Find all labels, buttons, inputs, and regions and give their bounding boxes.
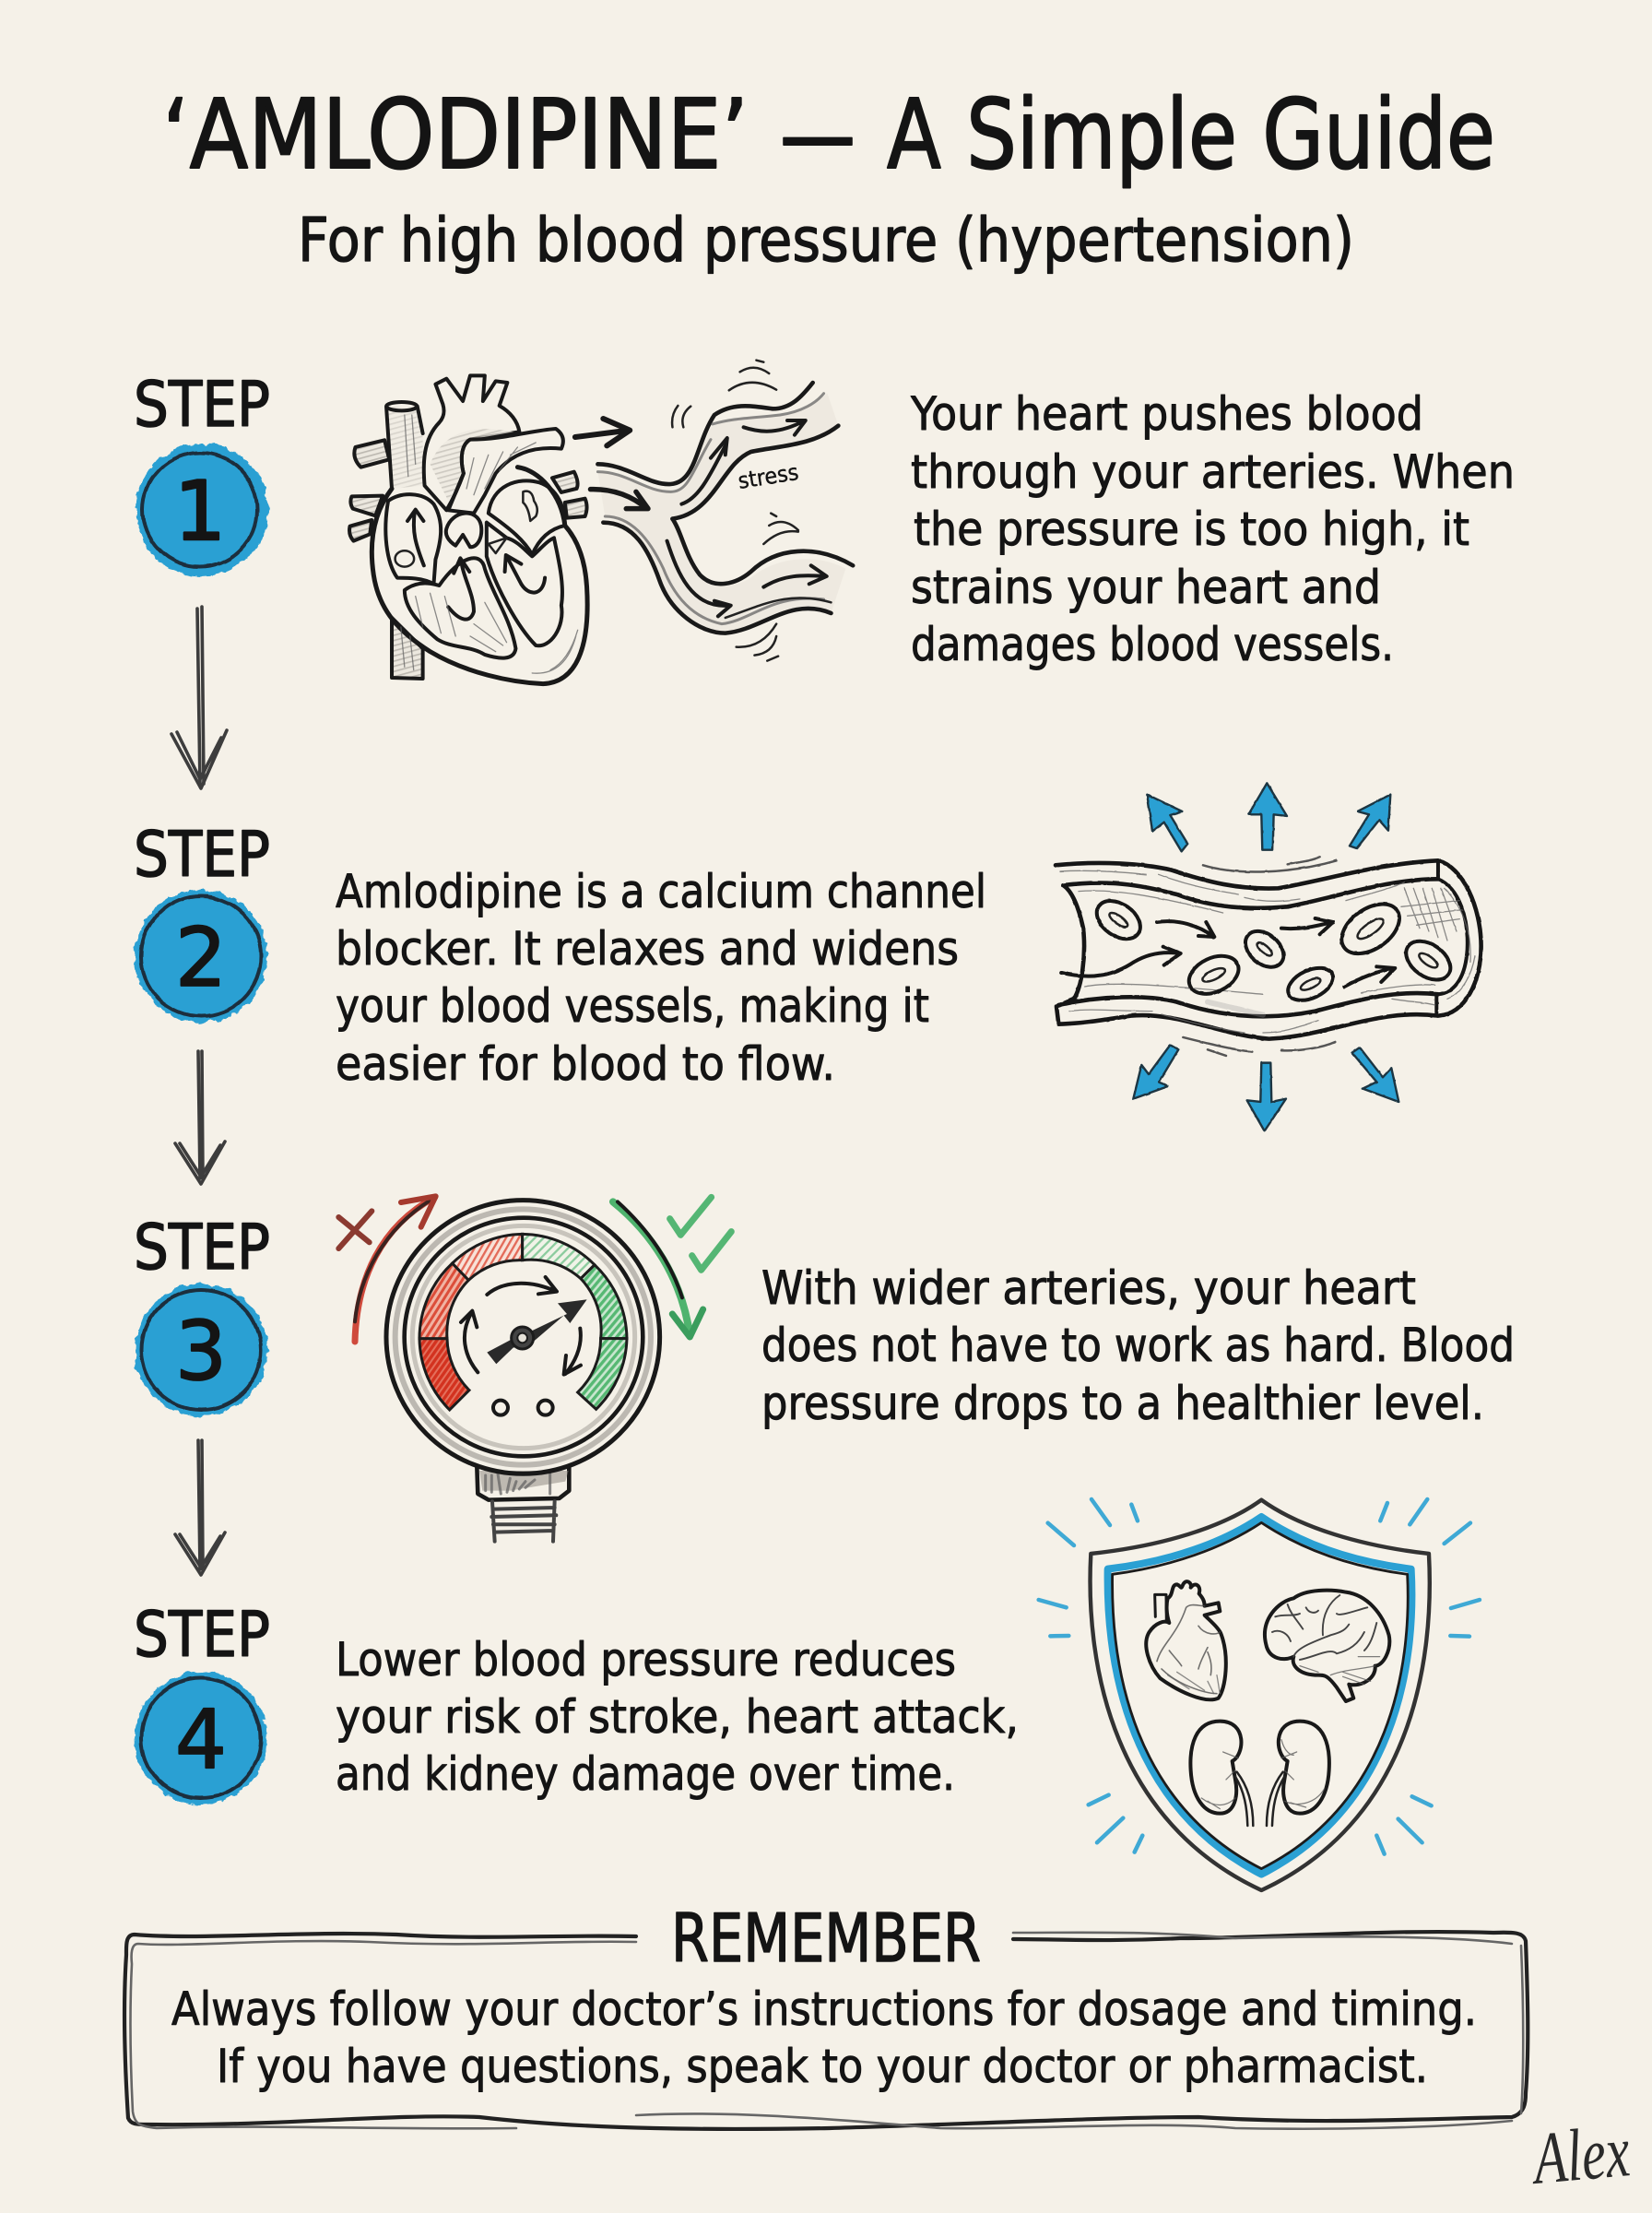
gauge green zones [523, 1234, 627, 1409]
heart shading [401, 415, 578, 673]
step 2 badge: STEP [134, 819, 270, 892]
step 3 text: does not have to work as hard. Blood [761, 1319, 1515, 1372]
step 4 text: your risk of stroke, heart attack, [336, 1690, 1019, 1744]
step 2 badge [134, 819, 270, 1023]
step 4 text: and kidney damage over time. [336, 1747, 955, 1801]
illustration: pressure gauge [338, 1196, 731, 1542]
step 2 badge: 2 [175, 910, 227, 1005]
title [162, 78, 1495, 191]
gauge stem [477, 1466, 569, 1542]
green falling arrow with ticks [613, 1197, 731, 1337]
flow arrows [1062, 918, 1395, 987]
step 1 text: through your arteries. When [911, 445, 1515, 499]
shield blue band [1108, 1517, 1411, 1875]
heart inner arrows [407, 510, 545, 620]
step 3 badge: STEP [134, 1212, 270, 1284]
step 4 badge: 4 [175, 1692, 227, 1787]
step 1 badge: STEP [134, 369, 270, 442]
step 1 text: the pressure is too high, it [914, 503, 1469, 556]
step 3 text: With wider arteries, your heart [761, 1261, 1416, 1315]
step 3 text [761, 1261, 1515, 1430]
gauge inner arrows [461, 1277, 581, 1375]
callout: remember [124, 1899, 1528, 2129]
step 4 text: Lower blood pressure reduces [336, 1633, 956, 1686]
step 3 badge: 3 [175, 1304, 227, 1399]
heart chambers [385, 480, 565, 658]
arteries [591, 361, 853, 661]
gauge red zones [419, 1234, 523, 1410]
step 1 text [910, 387, 1515, 671]
step 2 text: easier for blood to flow. [336, 1037, 835, 1091]
illustration: heart and stressed arteries [349, 361, 853, 684]
organ: brain [1265, 1591, 1389, 1701]
title: — [780, 78, 856, 191]
remember text: If you have questions, speak to your doctor or pharmacist. [217, 2040, 1428, 2093]
pump arrow [575, 419, 630, 445]
organ: kidneys [1190, 1722, 1329, 1826]
step 2 text [336, 865, 986, 1091]
gauge body [386, 1201, 660, 1473]
step 4 badge: STEP [134, 1599, 270, 1672]
step 2 text: Amlodipine is a calcium channel [336, 865, 986, 918]
shield outer outline [1091, 1500, 1430, 1890]
label: stress: stress [737, 459, 800, 494]
step 2 text: blocker. It relaxes and widens [336, 922, 959, 976]
arrow: step 2 to 3 [175, 1051, 225, 1184]
subtitle: For high blood pressure (hypertension) [298, 205, 1354, 276]
remember box outline [124, 1932, 1528, 2129]
arrow: step 1 to 2 [171, 607, 227, 788]
step 4 badge [134, 1599, 270, 1805]
shield rays [1039, 1499, 1480, 1854]
gauge screws [493, 1401, 553, 1415]
outward blue arrows [1133, 783, 1398, 1131]
red rising arrow with cross [338, 1196, 436, 1342]
step 1 text: damages blood vessels. [911, 618, 1394, 671]
heart vessels [349, 375, 587, 679]
red blood cells [1090, 893, 1457, 1007]
gauge needle [487, 1299, 587, 1364]
step 3 badge [134, 1212, 270, 1416]
remember text [171, 1982, 1477, 2093]
step 2 text: your blood vessels, making it [336, 979, 929, 1033]
remember text: Always follow your doctor’s instructions for dosage and timing. [171, 1982, 1477, 2036]
step 1 text: strains your heart and [911, 561, 1381, 614]
heart outline [372, 467, 587, 684]
illustration: protective shield [1039, 1499, 1480, 1890]
remember heading: REMEMBER [671, 1899, 981, 1977]
title: ‘AMLODIPINE’ [162, 78, 749, 191]
step 1 text: Your heart pushes blood [910, 387, 1423, 441]
motion lines [1183, 857, 1337, 1056]
step 1 badge [134, 369, 270, 576]
step 1 badge: 1 [174, 464, 226, 559]
illustration: widened blood vessel [1056, 783, 1481, 1131]
vessel shading [1060, 870, 1475, 1033]
step 4 text [336, 1633, 1019, 1801]
vessel walls [1056, 860, 1481, 1039]
organ: heart [1146, 1581, 1226, 1699]
arrow: step 3 to 4 [175, 1440, 225, 1575]
step 3 text: pressure drops to a healthier level. [761, 1377, 1484, 1430]
title: A Simple Guide [887, 78, 1495, 191]
